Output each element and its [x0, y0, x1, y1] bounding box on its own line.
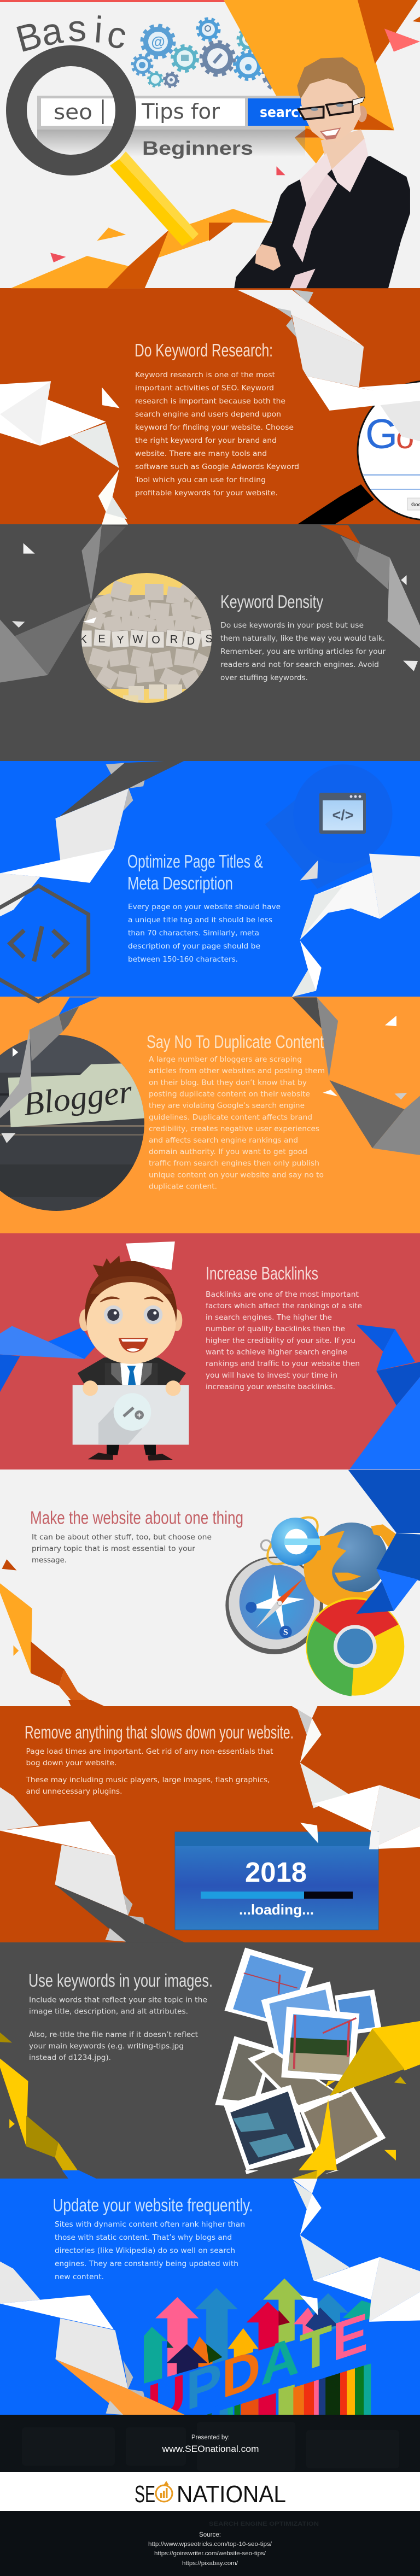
- body text: website. There are many tools and: [135, 450, 267, 458]
- body text: Also, re-title the file name if it doesn’t reflect: [29, 2031, 198, 2039]
- photo: blogger denim: Blogger: [21, 1073, 135, 1122]
- body text: research is important because both the: [135, 397, 285, 406]
- origami and icon shapes: [0, 760, 420, 997]
- body text: the right keyword for your brand and: [135, 437, 277, 445]
- photo: keyword tiles: K: [79, 634, 87, 646]
- search bar: [37, 96, 309, 157]
- grey origami shapes: [0, 525, 420, 683]
- panel: do keyword research: [0, 290, 420, 524]
- body text: domain authority. If you want to get good: [149, 1148, 307, 1156]
- body text: they are violating Google’s search engine: [149, 1102, 305, 1110]
- icon: google magnifier: o: [396, 419, 414, 455]
- photo: keyword tiles: [75, 573, 218, 704]
- background keyboard keys: [22, 2422, 399, 2471]
- origami shapes: [0, 1700, 420, 1942]
- body text: unique content on your website and say no to: [149, 1171, 324, 1180]
- body text: [32, 1533, 212, 1565]
- body text: your main keywords (e.g. writing-tips.jpg: [29, 2042, 184, 2051]
- footer: sources: https://goinswriter.com/website-seo-tips/: [154, 2550, 266, 2557]
- footer: sources: Source:: [199, 2531, 221, 2538]
- photo: keyword tiles: W: [133, 634, 143, 646]
- body text: on their blog. But they don’t know that by: [149, 1079, 307, 1087]
- footer: sources: http://www.wpseotricks.com/top-10-seo-tips/: [148, 2541, 272, 2548]
- photo: keyword tiles: R: [170, 634, 178, 646]
- word: UPDATE: UPDATE: [147, 2302, 368, 2435]
- heading: Say No To Duplicate Content: [147, 1032, 324, 1052]
- body text: [149, 1056, 325, 1191]
- body text: profitable keywords for your website.: [135, 489, 278, 497]
- gears cluster icon: [132, 19, 305, 90]
- character holding sign: +: [137, 1411, 142, 1420]
- heading: Use keywords in your images.: [28, 1970, 213, 1990]
- body text: Do use keywords in your post but use: [220, 622, 364, 630]
- origami shapes: [0, 1470, 420, 1700]
- body text: software such as Google Adwords Keyword: [135, 463, 299, 471]
- heading: Do Keyword Research:: [135, 340, 273, 360]
- photo: blogger denim: [0, 1034, 148, 1211]
- body text: Keyword research is one of the most: [135, 371, 275, 379]
- body text: factors which affect the rankings of a site: [206, 1302, 362, 1310]
- panel: update frequently: [0, 2179, 420, 2435]
- photo stack: [215, 1948, 386, 2170]
- body text: It can be about other stuff, too, but choose one: [32, 1533, 212, 1542]
- search bar: Tips for: [141, 99, 220, 124]
- body text: you will have to invest your time in: [206, 1372, 337, 1380]
- body text: A large number of bloggers are scraping: [149, 1056, 302, 1064]
- icon: hexagon code: [0, 886, 89, 1002]
- heading: Increase Backlinks: [206, 1263, 318, 1284]
- body text: and affects search engine rankings and: [149, 1137, 298, 1145]
- photo: keyword tiles: E: [98, 633, 106, 645]
- icon: google magnifier: G: [365, 411, 398, 458]
- panel: increase backlinks: [0, 1242, 420, 1470]
- photo: keyword tiles: O: [151, 634, 160, 646]
- icon: safari compass: [225, 1540, 323, 1654]
- panel: remove slow items: [0, 1700, 420, 1942]
- body text: directories (like Wikipedia) do so well on search: [55, 2247, 235, 2255]
- title word: Beginners: Beginners: [142, 138, 253, 159]
- yellow origami shapes: [0, 2021, 420, 2170]
- body text: [135, 371, 299, 497]
- photo: keyword tiles: D: [187, 635, 195, 647]
- icon: magnifier: [16, 56, 199, 246]
- body text: number of quality backlinks then the: [206, 1325, 345, 1333]
- right overlap shape: [369, 1831, 380, 1849]
- heading: Make the website about one thing: [30, 1508, 243, 1527]
- body text: rankings and traffic to your website then: [206, 1360, 360, 1368]
- heading: Remove anything that slows down your website.: [25, 1722, 294, 1742]
- presenter text: www.SEOnational.com: [161, 2444, 259, 2454]
- panel: optimize page titles: [0, 760, 420, 1002]
- panel: duplicate content: [0, 997, 420, 1211]
- footer: sources: SEARCH ENGINE OPTIMIZATION: [209, 2521, 319, 2527]
- footer: sources: [148, 2521, 319, 2567]
- header top stripe: [0, 0, 225, 2]
- body text: Include words that reflect your site topic in the: [29, 1997, 207, 2004]
- body text: Sites with dynamic content often rank higher than: [55, 2221, 245, 2229]
- photo: keyword tiles: Y: [116, 634, 124, 646]
- body text: guidelines. Duplicate content affects brand: [149, 1114, 312, 1122]
- blue band behind word: [144, 2319, 372, 2389]
- icon: code window: </>: [332, 807, 354, 823]
- woman portrait: [234, 57, 410, 288]
- body text: bog down your website.: [26, 1759, 117, 1767]
- body text: in search engines. The higher the: [206, 1314, 332, 1322]
- body text: credibility, creates negative user experiences: [149, 1125, 319, 1133]
- heading: Meta Description: [127, 873, 233, 893]
- logo: SEO National: [135, 2481, 286, 2508]
- body text: than 70 characters. Similarly, meta: [128, 929, 259, 938]
- footer: sources: https://pixabay.com/: [182, 2560, 238, 2567]
- body text: engines. They are constantly being updated with: [55, 2260, 238, 2268]
- presenter text: Presented by:: [191, 2434, 230, 2441]
- body text: over stuffing keywords.: [220, 674, 308, 682]
- body text: articles from other websites and posting them: [149, 1067, 325, 1075]
- panel: header: [0, 0, 420, 288]
- body text: Every page on your website should have: [128, 903, 281, 911]
- icon: internet explorer: [260, 1509, 325, 1572]
- gears cluster icon: @: [151, 33, 165, 50]
- loading box: 2018: [245, 1857, 307, 1888]
- search bar: seo: [54, 100, 92, 124]
- panel: about one thing: [0, 1470, 420, 1700]
- section 9 bottom remnants: [62, 2170, 339, 2179]
- body text: readers and not for search engines. Avoid: [220, 661, 379, 669]
- body text: posting duplicate content on their website: [149, 1090, 310, 1099]
- white origami shapes: [0, 290, 420, 524]
- heading: [127, 851, 263, 893]
- loading box: [175, 1823, 378, 1930]
- body text: Remember, you are writing articles for your: [220, 648, 386, 656]
- search bar: search: [260, 104, 308, 121]
- body text: description of your page should be: [128, 942, 260, 951]
- body text: search engine and users depend upon: [135, 411, 281, 419]
- body text: traffic from search engines then only publish: [149, 1160, 319, 1168]
- icon: google magnifier: [298, 381, 420, 524]
- blue origami shapes: [0, 1242, 420, 1470]
- logo: SEO National: NATIONAL: [177, 2481, 286, 2508]
- icon: code window: [319, 793, 366, 834]
- body text: Page load times are important. Get rid of any non-essentials that: [26, 1748, 273, 1756]
- body text: [220, 622, 386, 682]
- body text: instead of d1234.jpg).: [29, 2054, 111, 2062]
- body text: important activities of SEO. Keyword: [135, 384, 274, 393]
- body text: duplicate content.: [149, 1183, 217, 1191]
- body text: and unnecessary plugins.: [26, 1788, 122, 1796]
- update arrows chart: [144, 2279, 372, 2415]
- body text: higher the credibility of your site. If you: [206, 1337, 355, 1345]
- logo: SEO National: SE: [135, 2481, 155, 2508]
- grey origami shapes: [0, 997, 420, 1155]
- panel: keywords in images: [0, 1948, 420, 2170]
- body text: primary topic that is most essential to your: [32, 1545, 196, 1553]
- body text: [25, 1748, 273, 1796]
- body text: a unique title tag and it should be less: [128, 916, 272, 924]
- heading: Keyword Density: [220, 592, 323, 612]
- body text: image title, description, and alt attributes.: [29, 2007, 188, 2016]
- body text: new content.: [55, 2273, 104, 2281]
- icon: safari compass: S: [283, 1628, 288, 1637]
- footer: presented by: [22, 2422, 399, 2471]
- heading: Optimize Page Titles &: [127, 851, 263, 871]
- body text: [128, 903, 281, 964]
- body text: Backlinks are one of the most important: [206, 1291, 359, 1299]
- body text: [55, 2221, 245, 2281]
- body text: want to achieve higher search engine: [206, 1348, 347, 1357]
- body text: [29, 1997, 207, 2062]
- icon: firefox: [304, 1523, 396, 1609]
- photo: keyword tiles: S: [205, 633, 213, 645]
- icon: chrome: [306, 1597, 404, 1696]
- browser logos: [225, 1509, 404, 1696]
- white origami shapes: [0, 2179, 420, 2415]
- body text: These may including music players, large images, flash graphics,: [25, 1776, 270, 1784]
- loading box: ...loading...: [239, 1901, 314, 1918]
- body text: message.: [32, 1556, 67, 1565]
- heading: Update your website frequently.: [52, 2195, 253, 2215]
- body text: those with static content. That’s why blogs and: [55, 2234, 232, 2242]
- body text: Tool which you can use for finding: [135, 476, 266, 484]
- body text: [206, 1291, 362, 1391]
- header origami shapes: [11, 0, 420, 288]
- body text: keyword for finding your website. Choose: [135, 424, 294, 432]
- presenter text: [161, 2434, 259, 2454]
- panel: keyword density: [0, 525, 420, 704]
- body text: increasing your website backlinks.: [206, 1383, 335, 1391]
- character holding sign: [73, 1256, 189, 1461]
- title word: Basic: Basic: [11, 7, 130, 60]
- body text: between 150-160 characters.: [128, 956, 238, 964]
- body text: them naturally, like the way you would talk.: [220, 635, 385, 643]
